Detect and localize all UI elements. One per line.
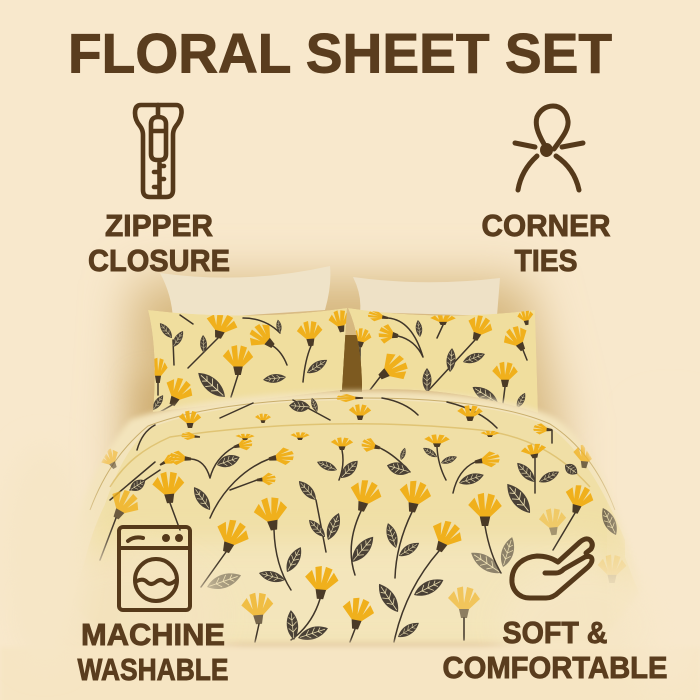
comforter fold band (90, 394, 625, 556)
label: corner ties: CORNER (482, 208, 610, 243)
flowers (103, 431, 626, 632)
icon: zipper (135, 105, 182, 197)
label: machine washable: MACHINE (81, 617, 225, 652)
icon: soft hand (512, 539, 592, 598)
lower surface lightening (132, 537, 602, 642)
leaves (127, 445, 621, 644)
label: soft and comfortable (442, 615, 668, 685)
icon: corner tie knot (515, 106, 583, 190)
bed shadow glow (125, 280, 560, 660)
panel: white back pillows (160, 266, 500, 320)
label: zipper closure: ZIPPER (105, 208, 213, 243)
panel: right floral pillow (348, 308, 538, 413)
label: soft and comfortable: SOFT & (502, 615, 608, 650)
panel: left floral pillow (148, 308, 353, 412)
label: machine washable: WASHABLE (78, 652, 228, 687)
label: machine washable (78, 617, 228, 687)
label: corner ties: TIES (514, 243, 578, 278)
label: zipper closure: CLOSURE (88, 243, 230, 278)
panel: floral comforter (86, 386, 636, 643)
label: zipper closure (88, 208, 230, 278)
pillow gap shadow (340, 335, 362, 392)
comforter top surface (90, 506, 630, 639)
stems (100, 447, 575, 642)
label: soft and comfortable: COMFORTABLE (442, 650, 668, 685)
bottom fade around icons (0, 420, 700, 700)
title: FLORAL SHEET SET (68, 22, 612, 84)
icon: washing machine (119, 527, 190, 610)
label: corner ties (482, 208, 610, 278)
